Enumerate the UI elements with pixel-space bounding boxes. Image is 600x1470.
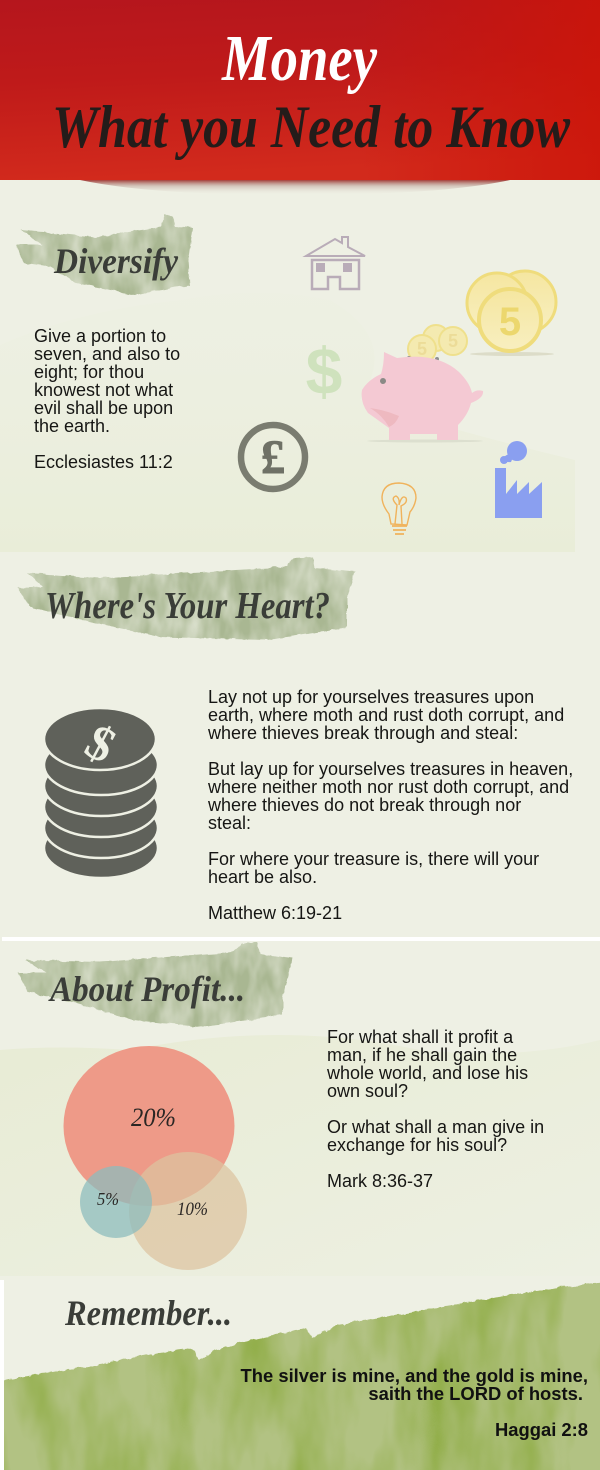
title: Money (221, 22, 378, 95)
verse: Mark: Mark 8:36-37 (327, 1171, 433, 1191)
panel: remember (0, 1280, 600, 1470)
icon: pound sign: £ (261, 431, 285, 484)
header band (0, 0, 600, 180)
icon: house (306, 237, 365, 289)
verse: Ecclesiastes: eight; for thou (34, 362, 144, 382)
chart: overlapping circles: 20% (131, 1103, 176, 1132)
icon: factory (495, 441, 542, 518)
chart: overlapping circles: 5% (97, 1189, 119, 1209)
icon: dollar sign: $ (306, 334, 342, 408)
watercolor wash: section one (0, 292, 575, 552)
verse: Mark: own soul? (327, 1081, 408, 1101)
icon: small gold coins: 5 (448, 331, 458, 351)
icon: small gold coins (408, 325, 467, 363)
heading: remember: Remember... (64, 1293, 232, 1333)
brush stroke: profit (18, 943, 292, 1027)
brush stroke: heart (18, 557, 355, 640)
divider strip (2, 937, 600, 941)
verse: Mark: whole world, and lose his (326, 1063, 528, 1083)
verse: Matthew: where neither moth nor rust doth corrupt, and (207, 777, 569, 797)
verse: Mark: For what shall it profit a (327, 1027, 514, 1047)
header shadow (80, 180, 510, 195)
verse: Matthew: steal: (208, 813, 251, 833)
verse: Ecclesiastes: Ecclesiastes 11:2 (34, 452, 173, 472)
verse: Mark: Or what shall a man give in (327, 1117, 544, 1137)
verse: Haggai: saith the LORD of hosts. (368, 1383, 583, 1404)
verse: Matthew: Matthew 6:19-21 (208, 903, 342, 923)
verse: Ecclesiastes: knowest not what (34, 380, 173, 400)
icon: pound sign (241, 425, 305, 489)
verse: Mark (326, 1027, 544, 1191)
panel: where's your heart (18, 557, 573, 923)
icon: small gold coins: 5 (417, 339, 427, 359)
icon: coin stack: $ (77, 713, 125, 774)
heading: diversify: Diversify (53, 241, 179, 281)
verse: Matthew: For where your treasure is, there will your (208, 849, 539, 869)
verse: Ecclesiastes: seven, and also to (34, 344, 180, 364)
icon: piggy bank (362, 352, 483, 442)
brush stroke: diversify (17, 213, 193, 295)
panel: about profit (18, 943, 544, 1270)
heading: heart: Where's Your Heart? (45, 585, 330, 627)
chart: overlapping circles: 10% (177, 1199, 208, 1220)
verse: Haggai: The silver is mine, and the gold is mine, (241, 1365, 588, 1386)
verse: Mark: man, if he shall gain the (327, 1045, 517, 1065)
watercolor wash: section three (0, 1035, 600, 1276)
verse: Matthew: But lay up for yourselves treasures in heaven, (208, 759, 573, 779)
title (52, 22, 571, 160)
verse: Matthew: earth, where moth and rust doth corrupt, and (208, 705, 564, 725)
verse: Ecclesiastes: evil shall be upon (34, 398, 173, 418)
verse: Matthew: Lay not up for yourselves treasures upon (208, 687, 534, 707)
icon: large gold coins (467, 271, 556, 356)
icon: large gold coins: 5 (499, 300, 521, 344)
verse: Ecclesiastes (34, 326, 180, 472)
left margin strip (0, 1280, 4, 1470)
verse: Matthew: where thieves break through and steal: (207, 723, 518, 743)
icon: coin stack (44, 708, 158, 878)
verse: Ecclesiastes: Give a portion to (34, 326, 166, 346)
verse: Haggai: Haggai 2:8 (495, 1419, 588, 1440)
verse: Haggai (241, 1365, 588, 1440)
chart: overlapping circles (64, 1046, 247, 1270)
verse: Matthew (207, 687, 573, 923)
watercolor green band (0, 1282, 600, 1470)
verse: Ecclesiastes: the earth. (34, 416, 110, 436)
verse: Mark: exchange for his soul? (327, 1135, 507, 1155)
verse: Matthew: where thieves do not break through nor (207, 795, 521, 815)
icon: light bulb (382, 483, 416, 534)
heading: profit: About Profit... (48, 969, 245, 1009)
verse: Matthew: heart be also. (208, 867, 317, 887)
panel: diversify (17, 213, 193, 472)
